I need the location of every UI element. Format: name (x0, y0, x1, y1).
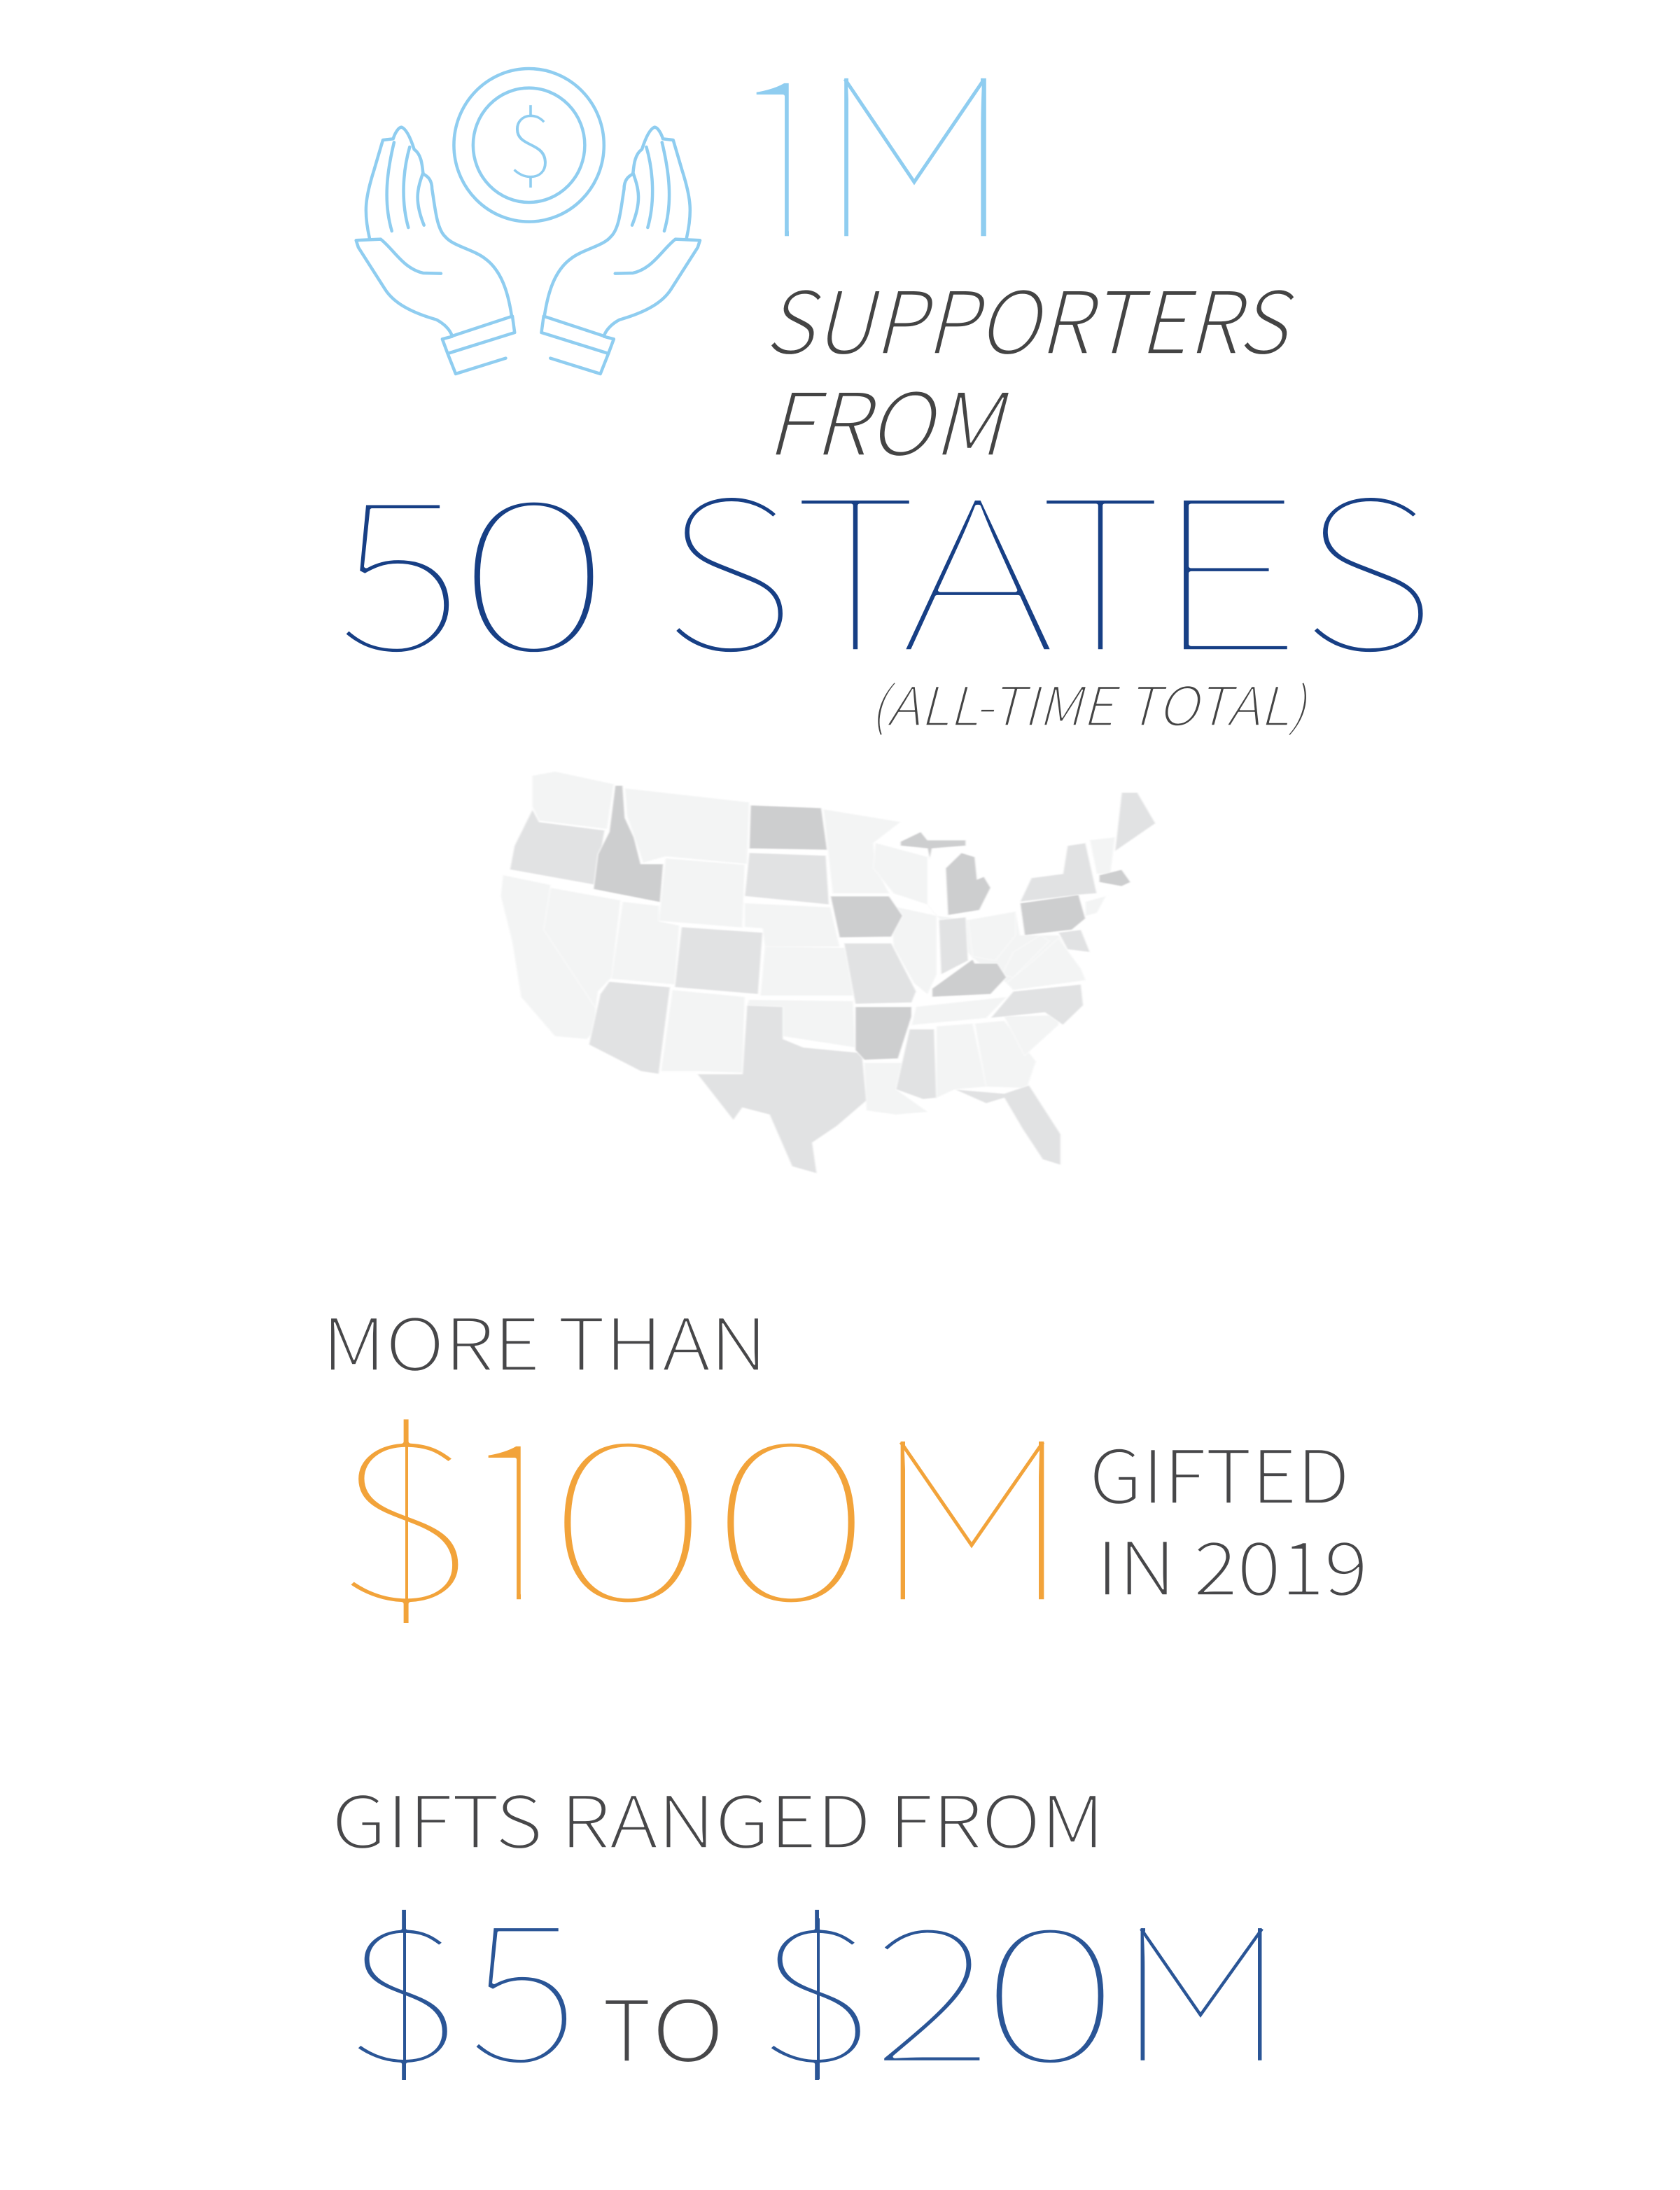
stat: 1M (724, 0, 1018, 302)
stat: $100M: $ (328, 1343, 480, 1666)
stat: 50 states: S (661, 408, 796, 712)
stat: $100M (328, 1343, 1076, 1666)
stat: $100M: 1 (456, 1343, 573, 1666)
map: United States shaded by state (500, 772, 1156, 1173)
stat: $20M (752, 1846, 1289, 2116)
stat: $20M: $ (752, 1846, 878, 2116)
stat: $20M: M (1114, 1846, 1289, 2116)
stat: $100M: 0 (544, 1343, 712, 1666)
stat: $20M: 2 (872, 1846, 993, 2116)
label: supporters: SUPPORTERS (764, 254, 1294, 379)
label: gifted: GIFTED (1089, 1418, 1350, 1525)
icon: dollar sign in coin: $ (507, 76, 553, 202)
stat: 50 states: 0 (455, 408, 612, 712)
stat: 50 states: E (1152, 408, 1303, 712)
stat: 50 states: A (899, 408, 1058, 712)
stat: 50 states: S (1298, 408, 1436, 712)
stat: 50 states: 5 (336, 408, 464, 712)
stat: $5: 5 (468, 1846, 580, 2116)
stat: $100M: 0 (707, 1343, 875, 1666)
label: to: T (603, 1964, 651, 2086)
label: gifts ranged from: GIFTS RANGED FROM (332, 1766, 1105, 1869)
stat: $5: $ (339, 1846, 465, 2116)
label: to: O (652, 1964, 724, 2086)
stat: 50 states: T (792, 408, 918, 712)
label: in 2019: IN 2019 (1096, 1510, 1368, 1617)
stat: $20M: 0 (979, 1846, 1121, 2116)
stat: 50 states: T (1037, 408, 1163, 712)
icon: hands holding a coin (356, 69, 700, 374)
stat: $100M: M (869, 1343, 1076, 1666)
label: from: FROM (766, 356, 1010, 480)
note: all-time total: (ALL-TIME TOTAL) (869, 664, 1308, 741)
label: more than: MORE THAN (322, 1288, 767, 1391)
stat: $5 (339, 1846, 580, 2116)
